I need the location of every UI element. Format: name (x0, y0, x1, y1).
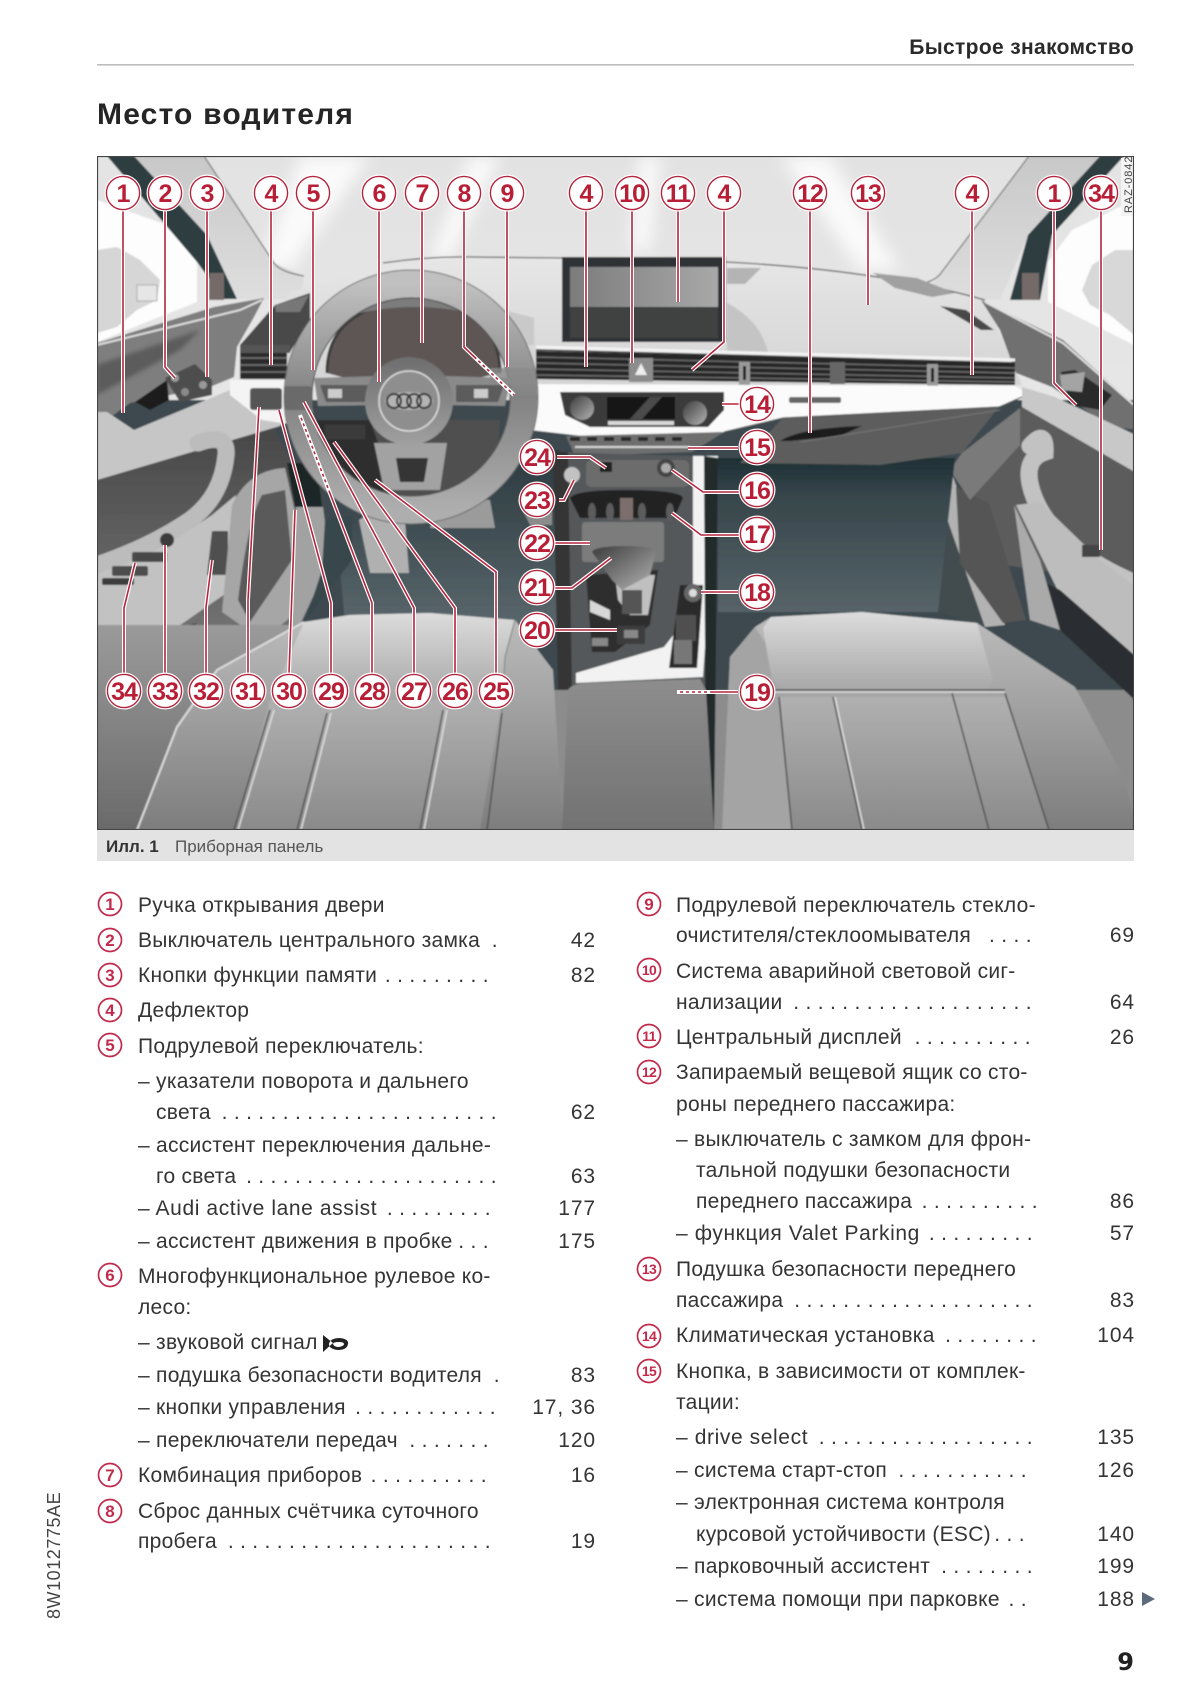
item 12: переднего пассажира (696, 1190, 912, 1213)
item 5: – указатели поворота и дальнего (138, 1070, 469, 1093)
item 5: ....................... (222, 1101, 503, 1124)
central display (562, 257, 726, 342)
item 5: 175 (558, 1230, 596, 1253)
item 12: ......... (929, 1222, 1039, 1245)
item 14: 104 (1097, 1324, 1135, 1347)
illustration artwork (97, 156, 1140, 830)
item 7: 16 (571, 1464, 596, 1487)
item 2: 2 (105, 931, 115, 950)
figure: dashboard illustration (97, 156, 1140, 830)
instrument cluster (327, 298, 500, 382)
item 8: 8 (105, 1502, 115, 1521)
item 12: 12 (642, 1064, 657, 1080)
figure code tag: RAZ-0842 (1123, 156, 1135, 213)
console armrest (562, 679, 714, 830)
item 12: тальной подушки безопасности (696, 1159, 1010, 1182)
item 14: 14 (642, 1328, 657, 1344)
item 6: – кнопки управления (138, 1396, 346, 1419)
item 15 (638, 1360, 1135, 1611)
right door (947, 300, 1133, 700)
callout numbers top row: 1 (1048, 180, 1062, 208)
item 7 (98, 1464, 596, 1487)
callout numbers top row: 4 (265, 180, 279, 208)
callout numbers top row: 1 (117, 180, 131, 208)
air vents strip (240, 345, 1015, 386)
item 14: ........ (945, 1324, 1043, 1347)
item 5: – ассистент переключения дальне- (138, 1134, 491, 1157)
callout numbers top row: 11 (666, 180, 691, 208)
item 5: – Audi active lane assist (138, 1197, 377, 1220)
title: Место водителя (97, 98, 354, 131)
callout numbers top row: 6 (373, 180, 386, 208)
item 6: 83 (571, 1364, 596, 1387)
item 9 (638, 892, 1135, 947)
item 10: нализации (676, 991, 782, 1014)
windshield background (98, 157, 1133, 402)
right list column (638, 892, 1135, 1611)
item 6: 17, 36 (532, 1396, 596, 1419)
button row (566, 432, 724, 456)
callout numbers top row: 13 (855, 180, 881, 208)
right pillar and window (915, 156, 1134, 345)
item 15: 140 (1097, 1523, 1135, 1546)
callout numbers middle column: 24 (524, 444, 551, 472)
callout numbers top row: 4 (966, 180, 980, 208)
callout numbers top row: 10 (619, 180, 645, 208)
item 10: Система аварийной световой сиг- (676, 960, 1016, 983)
callout numbers bottom row: 31 (235, 678, 262, 706)
right floor (718, 458, 955, 612)
item 5: – ассистент движения в пробке (138, 1230, 453, 1253)
item 12: – выключатель с замком для фрон- (676, 1128, 1031, 1151)
item 15: тации: (676, 1391, 740, 1414)
item 6: – звуковой сигнал (138, 1331, 318, 1354)
item 3: ......... (385, 964, 495, 987)
item 5: го света (156, 1165, 236, 1188)
arrow: continues on next page (1142, 1592, 1155, 1606)
steering column and inner wheel area (316, 420, 500, 496)
item 13: 13 (642, 1261, 657, 1277)
right seat (722, 612, 1137, 830)
item 9: 9 (644, 895, 654, 914)
item 13: пассажира (676, 1289, 783, 1312)
item 7: .......... (371, 1464, 493, 1487)
item 6: ............ (355, 1396, 502, 1419)
callout numbers bottom row: 29 (318, 678, 344, 706)
item 6: 6 (105, 1266, 115, 1285)
item 3: Кнопки функции памяти (138, 964, 377, 987)
caption band (97, 830, 1134, 861)
page number: 9 (1117, 1648, 1134, 1676)
callout numbers bottom row: 34 (111, 678, 138, 706)
item 15: 188 (1097, 1588, 1135, 1611)
item 5: 5 (105, 1036, 115, 1055)
item 13 (638, 1258, 1135, 1312)
callout numbers bottom row: 30 (276, 678, 302, 706)
item 13: Подушка безопасности переднего (676, 1258, 1016, 1281)
item 8: пробега (138, 1530, 217, 1553)
callout numbers bottom row: 28 (359, 678, 386, 706)
item 11: 26 (1110, 1026, 1135, 1049)
figure code tag (1121, 157, 1133, 216)
item 14 (638, 1324, 1135, 1348)
item 13: 83 (1110, 1289, 1135, 1312)
steering wheel (250, 270, 538, 524)
item 15: 15 (642, 1363, 657, 1379)
item 14: Климатическая установка (676, 1324, 935, 1347)
item 2: . (492, 929, 504, 952)
item 9: Подрулевой переключатель стекло- (676, 894, 1036, 917)
item 4: 4 (105, 1001, 115, 1020)
callout numbers top row: 12 (797, 180, 823, 208)
item 15: – drive select (676, 1426, 808, 1449)
item 9: .... (989, 924, 1038, 947)
item 9: очистителя/стеклоомывателя (676, 924, 971, 947)
callout numbers top row: 4 (718, 180, 732, 208)
callout numbers bottom row: 25 (483, 678, 510, 706)
item 3: 3 (105, 966, 115, 985)
callout numbers top row (104, 174, 1120, 212)
item 15: Кнопка, в зависимости от комплек- (676, 1360, 1026, 1383)
callout numbers right column: 14 (744, 391, 771, 419)
item 5: ... (458, 1230, 495, 1253)
item 15: – электронная система контроля (676, 1491, 1005, 1514)
item 1: 1 (105, 895, 115, 914)
item 11 (638, 1024, 1135, 1049)
item 11: Центральный дисплей (676, 1026, 902, 1049)
item 6: ....... (409, 1429, 495, 1452)
item 10: 64 (1110, 991, 1135, 1014)
callout numbers top row: 5 (307, 180, 321, 208)
item 15: ... (994, 1523, 1031, 1546)
left door (98, 298, 352, 626)
item 8: Сброс данных счётчика суточного (138, 1500, 479, 1523)
item 15: 199 (1097, 1555, 1135, 1578)
page header: Быстрое знакомство (909, 36, 1134, 59)
callout numbers bottom row (106, 672, 514, 710)
item 6: лесо: (138, 1296, 192, 1319)
item 15: .. (1009, 1588, 1033, 1611)
item 2: Выключатель центрального замка (138, 929, 480, 952)
callout numbers top row: 2 (159, 180, 172, 208)
item 13: .................... (794, 1289, 1039, 1312)
item 5: ..................... (246, 1165, 503, 1188)
item 12: 57 (1110, 1222, 1135, 1245)
white trim band (230, 380, 1022, 438)
item 12: роны переднего пассажира: (676, 1093, 956, 1116)
center console (553, 452, 718, 830)
item 3 (98, 964, 596, 987)
item 5: 62 (571, 1101, 596, 1124)
item 11: .......... (915, 1026, 1037, 1049)
item 3: 82 (571, 964, 596, 987)
item 15: – система помощи при парковке (676, 1588, 1000, 1611)
item 6: – подушка безопасности водителя (138, 1364, 482, 1387)
leader lines (123, 210, 1101, 692)
callout numbers top row: 4 (580, 180, 594, 208)
caption band: Приборная панель (175, 837, 323, 856)
item 10: .................... (793, 991, 1038, 1014)
item 8: 19 (571, 1530, 596, 1553)
item 8 (98, 1500, 596, 1553)
item 12: .......... (922, 1190, 1044, 1213)
item 9: 69 (1110, 924, 1135, 947)
callout numbers middle column: 20 (524, 617, 550, 645)
item 15: .................. (819, 1426, 1039, 1449)
item 15: ........... (898, 1459, 1033, 1482)
item 7: 7 (105, 1466, 115, 1485)
callout numbers top row: 9 (501, 180, 514, 208)
item 7: Комбинация приборов (138, 1464, 362, 1487)
item 12 (638, 1060, 1135, 1245)
left pillar and window (97, 156, 304, 342)
callout numbers middle column: 23 (524, 487, 550, 515)
callout numbers top row: 34 (1088, 180, 1115, 208)
callout numbers right column: 18 (744, 579, 771, 607)
item 11: 11 (642, 1028, 657, 1044)
callout numbers top row: 3 (201, 180, 214, 208)
item 15: – парковочный ассистент (676, 1555, 930, 1578)
callout numbers right column: 16 (744, 477, 770, 505)
caption band: Илл. 1 (106, 837, 159, 856)
left seat (97, 613, 563, 830)
side document code: 8W1012775AE (44, 1492, 64, 1619)
item 10 (638, 958, 1135, 1014)
item 15: 126 (1097, 1459, 1135, 1482)
climate control panel (560, 392, 724, 427)
callout numbers middle column: 21 (524, 574, 551, 602)
item 15: ........ (941, 1555, 1039, 1578)
item 5: 63 (571, 1165, 596, 1188)
item 5 (98, 1034, 596, 1253)
callout numbers right column: 17 (744, 521, 770, 549)
lower cabin base (554, 689, 1133, 829)
callout numbers middle column: 22 (524, 530, 550, 558)
item 5: 177 (558, 1197, 596, 1220)
item 2: 42 (571, 929, 596, 952)
glove box (740, 407, 1000, 465)
item 4: Дефлектор (138, 999, 249, 1022)
callout numbers right column (738, 386, 776, 710)
item 5: света (156, 1101, 211, 1124)
left floor and pedals (330, 450, 560, 625)
item 12: – функция Valet Parking (676, 1222, 920, 1245)
item 12: 86 (1110, 1190, 1135, 1213)
item 6: – переключатели передач (138, 1429, 398, 1452)
callout numbers bottom row: 33 (152, 678, 178, 706)
item 6: 120 (558, 1429, 596, 1452)
callout numbers top row: 7 (416, 180, 429, 208)
callout numbers bottom row: 27 (401, 678, 427, 706)
item 10: 10 (642, 962, 657, 978)
callout numbers bottom row: 32 (193, 678, 219, 706)
left list column (98, 892, 596, 1553)
item 8: ...................... (228, 1530, 497, 1553)
item 2 (98, 928, 596, 952)
item 6 (98, 1264, 596, 1452)
item 5: ......... (387, 1197, 497, 1220)
callout numbers bottom row: 26 (442, 678, 468, 706)
item 15: 135 (1097, 1426, 1135, 1449)
callout numbers top row: 8 (458, 180, 472, 208)
item 15: курсовой устойчивости (ESC) (696, 1523, 991, 1546)
item 15: – система старт-стоп (676, 1459, 887, 1482)
item 12: Запираемый вещевой ящик со сто- (676, 1061, 1028, 1084)
dashboard top (240, 257, 1022, 385)
item 5: Подрулевой переключатель: (138, 1035, 424, 1058)
item 1: Ручка открывания двери (138, 894, 385, 917)
item 6: Многофункциональное рулевое ко- (138, 1265, 491, 1288)
callout numbers middle column (518, 438, 556, 648)
floor base (97, 400, 1134, 700)
callout numbers right column: 15 (744, 434, 771, 462)
item 6: . (494, 1364, 506, 1387)
callout numbers right column: 19 (744, 679, 770, 707)
